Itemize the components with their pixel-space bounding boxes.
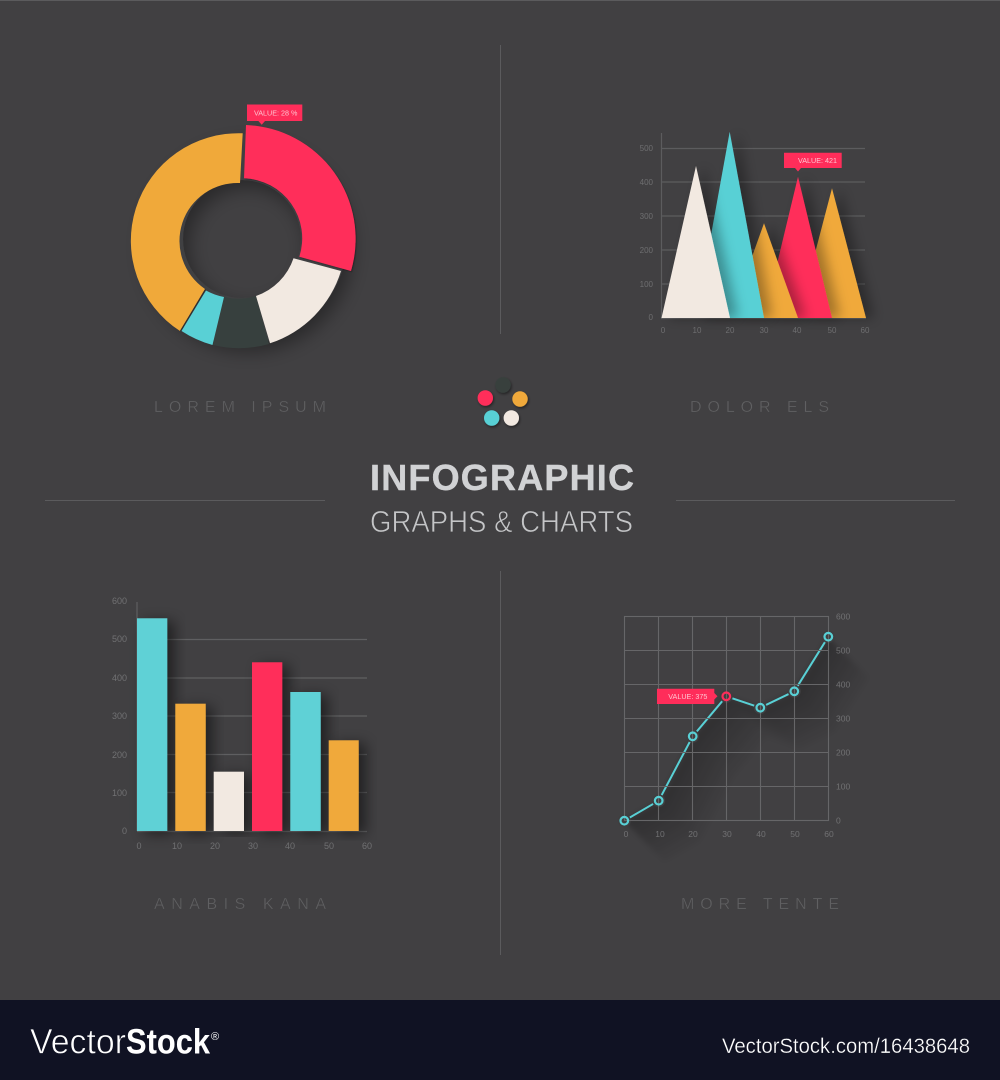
triangle y axis labels: 500 [640, 144, 654, 153]
triangle: cream 10 [662, 166, 730, 318]
panel: triangle chart [640, 132, 870, 335]
label: dolor els: DOLOR ELS [690, 399, 829, 416]
triangle y axis labels: 300 [640, 212, 654, 221]
bar y axis labels: 200 [112, 750, 127, 760]
bar y axis labels: 0 [122, 826, 127, 836]
subtitle: GRAPHS & CHARTS [370, 504, 633, 539]
line tooltip: VALUE: 375 [668, 692, 707, 701]
line chart grid [624, 616, 829, 821]
donut tooltip: VALUE: 28 % [254, 108, 298, 118]
label: more tente: MORE TENTE [681, 896, 839, 913]
line series [624, 637, 828, 821]
bar x axis labels: 20 [210, 841, 220, 851]
line y axis labels: 100 [836, 782, 850, 792]
triangle: orange 30 [730, 223, 798, 318]
bar y axis labels: 100 [112, 788, 127, 798]
line x axis labels: 30 [722, 829, 732, 839]
donut gap: orange to teal [180, 290, 206, 331]
bar x axis labels: 0 [136, 841, 142, 851]
triangle: orange 50 [798, 188, 866, 318]
donut slice: dark [213, 296, 269, 348]
donut slice: orange [131, 133, 243, 331]
donut shadow [160, 157, 324, 321]
line y axis labels: 200 [836, 748, 850, 758]
title: INFOGRAPHIC [370, 457, 634, 498]
bar: 40 [290, 692, 321, 831]
donut tooltip [247, 104, 302, 125]
triangle y axis labels: 0 [649, 313, 654, 322]
line points [620, 633, 832, 824]
footer registered mark: ® [211, 1031, 219, 1043]
donut slice: cream [256, 258, 341, 343]
bar x axis labels: 60 [362, 841, 372, 851]
line y axis labels: 300 [836, 714, 850, 724]
bar y axis labels: 500 [112, 634, 127, 644]
triangle chart grid [661, 133, 866, 318]
triangle y axis labels: 200 [640, 246, 654, 255]
footer logo: Vector: Vector [30, 1022, 126, 1062]
bar: 0 [137, 618, 167, 831]
triangle x axis labels: 10 [693, 326, 702, 335]
triangle y axis labels: 400 [640, 178, 654, 187]
bar x axis labels: 50 [324, 841, 334, 851]
point halos [618, 630, 835, 827]
bar x axis labels: 30 [248, 841, 258, 851]
bar y axis labels: 400 [112, 673, 127, 683]
bar chart grid [137, 602, 367, 832]
triangle x axis labels: 40 [793, 326, 802, 335]
line x axis labels: 60 [824, 829, 834, 839]
footer url: VectorStock.com/16438648 [722, 1035, 970, 1058]
donut slice: red [244, 125, 356, 271]
line x axis labels: 20 [688, 829, 698, 839]
line x axis labels: 0 [624, 829, 629, 839]
triangle x axis labels: 30 [760, 326, 769, 335]
bar x axis labels: 40 [285, 841, 295, 851]
bar x axis labels [136, 841, 372, 851]
footer logo: Stock: Stock [126, 1022, 210, 1062]
line tooltip [657, 689, 718, 704]
triangle y axis labels [640, 144, 654, 322]
triangle x axis labels [661, 326, 870, 335]
line y axis labels: 600 [836, 612, 850, 622]
line x axis labels: 10 [655, 829, 665, 839]
bar y axis labels: 600 [112, 596, 127, 606]
panel: line chart [618, 612, 868, 861]
bar: 50 [329, 740, 359, 831]
bar y axis labels [112, 596, 127, 836]
label: lorem ipsum: LOREM IPSUM [154, 399, 326, 416]
triangle tooltip: VALUE: 421 [798, 156, 837, 165]
donut slice: teal [182, 290, 224, 345]
triangle x axis labels: 0 [661, 326, 666, 335]
panel: bar chart [112, 596, 372, 851]
bar: 30 [252, 662, 282, 831]
logo dots [478, 377, 528, 426]
line x axis labels: 40 [756, 829, 766, 839]
bar: 10 [175, 704, 206, 831]
line long shadow [624, 637, 868, 861]
triangle: teal 20 [696, 132, 764, 318]
highlighted point [722, 692, 730, 700]
line x axis labels [624, 829, 834, 839]
triangle x axis labels: 60 [861, 326, 870, 335]
bar y axis labels: 300 [112, 711, 127, 721]
bar x axis labels: 10 [172, 841, 182, 851]
panel: donut chart [131, 104, 356, 348]
bar: 20 [214, 772, 244, 831]
triangle: red 40 [764, 177, 832, 318]
line y axis labels: 500 [836, 646, 850, 656]
line y axis labels: 0 [836, 816, 841, 826]
triangle y axis labels: 100 [640, 280, 654, 289]
line y axis labels: 400 [836, 680, 850, 690]
label: anabis kana: ANABIS KANA [154, 896, 326, 913]
footer bar [0, 1000, 1000, 1080]
triangle x axis labels: 50 [828, 326, 837, 335]
line y axis labels [836, 612, 850, 826]
line x axis labels: 50 [790, 829, 800, 839]
triangle x axis labels: 20 [726, 326, 735, 335]
triangle tooltip [784, 153, 842, 172]
